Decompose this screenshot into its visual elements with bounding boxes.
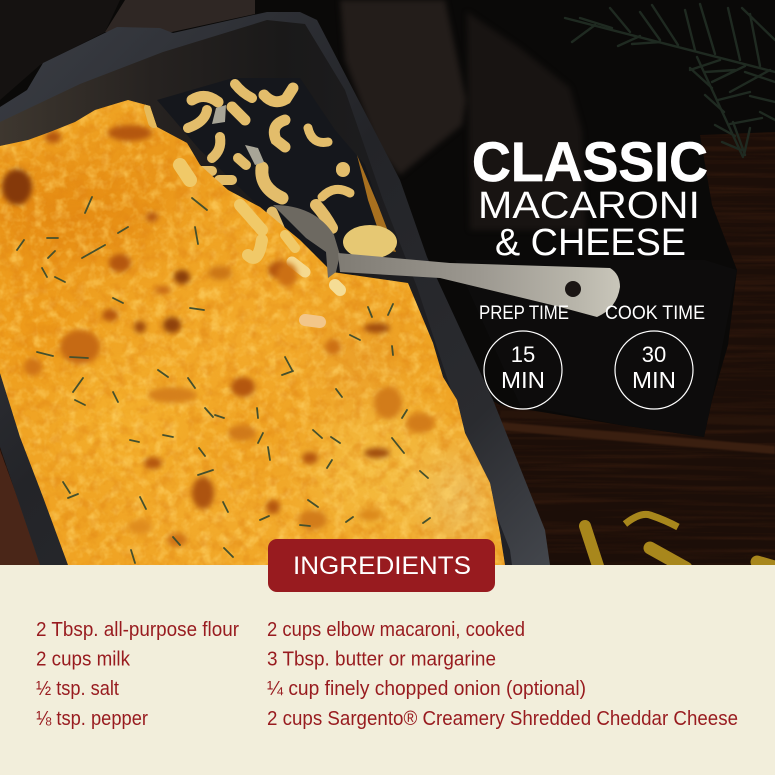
prep time unit: MIN bbox=[501, 367, 545, 393]
ingredients left column: 2 cups milk bbox=[36, 648, 131, 670]
ingredients left column bbox=[36, 619, 239, 730]
baking dish bbox=[0, 12, 550, 565]
macaroni mound above the spoon handle bbox=[343, 225, 397, 259]
cook time unit: MIN bbox=[632, 367, 676, 393]
ingredients right column: 2 cups elbow macaroni, cooked bbox=[267, 619, 525, 641]
ingredients heading badge bbox=[268, 539, 495, 592]
dish inner wall bbox=[0, 20, 512, 565]
cheese texture bbox=[0, 100, 504, 565]
cook time circle bbox=[615, 331, 693, 409]
title bbox=[472, 130, 708, 264]
macaroni pieces in the dish bbox=[188, 84, 350, 235]
ingredients right column: ¼ cup finely chopped onion (optional) bbox=[267, 678, 586, 700]
title line: and cheese: & CHEESE bbox=[495, 222, 686, 264]
broad colour variation bbox=[0, 130, 488, 555]
prep time value: 15 bbox=[511, 342, 535, 367]
dish floor exposed bbox=[157, 78, 254, 201]
cook time value: 30 bbox=[642, 342, 666, 367]
ingredients left column: ⅛ tsp. pepper bbox=[36, 708, 148, 730]
onion flecks bbox=[212, 105, 264, 165]
cook time bbox=[605, 303, 705, 409]
dish outer rim and handle bbox=[0, 12, 550, 565]
title line: classic: CLASSIC bbox=[472, 130, 708, 193]
wooden table bbox=[0, 132, 775, 565]
ingredients right column: 3 Tbsp. butter or margarine bbox=[267, 648, 496, 670]
melted cheese surface bbox=[0, 100, 505, 565]
rosemary sprig top right bbox=[565, 4, 775, 157]
rosemary flecks on cheese bbox=[17, 197, 430, 563]
macaroni poking out near the spoon bbox=[150, 108, 340, 322]
melted cheese streak on the wall bbox=[357, 155, 396, 252]
photo: baked macaroni dish on a dark table bbox=[0, 0, 775, 570]
ingredients left column: ½ tsp. salt bbox=[36, 678, 119, 700]
title line: macaroni: MACARONI bbox=[478, 185, 700, 227]
cook time label: COOK TIME bbox=[605, 303, 705, 324]
ingredients left column: 2 Tbsp. all-purpose flour bbox=[36, 619, 239, 641]
dark cloth behind dish bbox=[0, 0, 775, 437]
spoon handle hole bbox=[565, 281, 581, 297]
prep time label: PREP TIME bbox=[479, 303, 569, 324]
spoon handle bbox=[338, 253, 620, 317]
ingredients right column: 2 cups Sargento® Creamery Shredded Cheddar Cheese bbox=[267, 708, 738, 730]
spoon bowl bbox=[273, 205, 340, 278]
serving spoon bbox=[273, 205, 620, 317]
prep time bbox=[479, 303, 569, 409]
prep time circle bbox=[484, 331, 562, 409]
ingredients heading badge: INGREDIENTS bbox=[293, 552, 471, 580]
ingredients right column bbox=[267, 619, 738, 730]
browned spots bbox=[2, 125, 434, 547]
panel: ingredients bbox=[0, 539, 775, 775]
loose dry macaroni on the table bbox=[585, 514, 775, 568]
